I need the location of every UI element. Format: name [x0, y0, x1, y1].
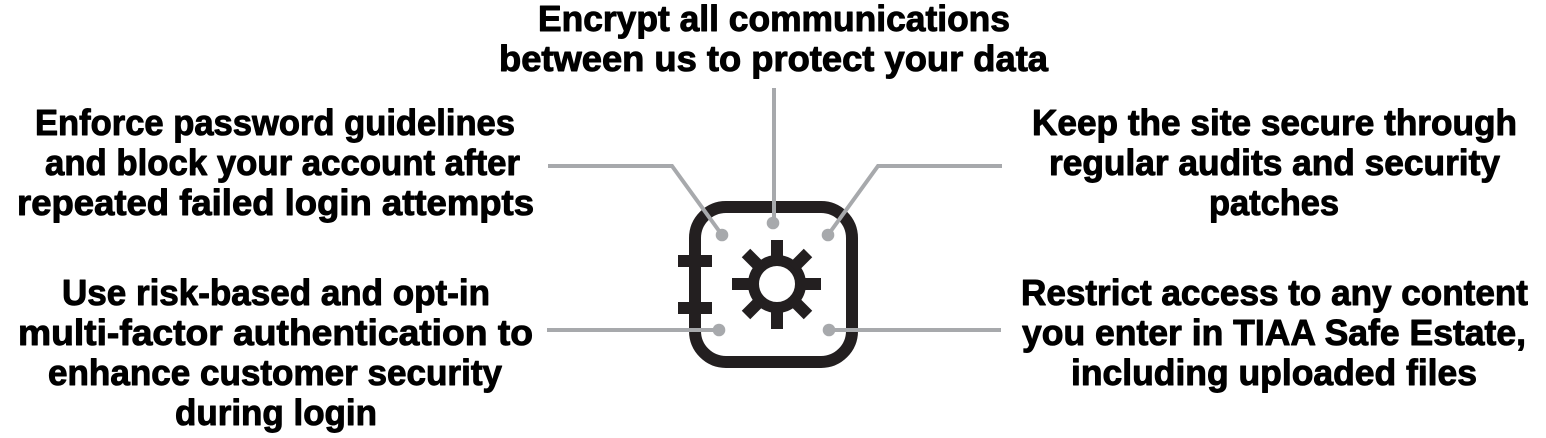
text: site audits: regular audits and security	[1049, 142, 1500, 183]
text: site audits: patches	[1209, 182, 1339, 223]
text: site audits	[1032, 102, 1517, 223]
text: restrict access: Restrict access to any content	[1021, 272, 1528, 313]
callout connectors	[547, 88, 1002, 330]
text: multi-factor authentication: enhance customer security	[48, 352, 502, 393]
text: password guidelines: Enforce password guidelines	[35, 102, 515, 143]
icon: safe	[678, 207, 852, 362]
text: password guidelines	[17, 102, 534, 223]
text: password guidelines: and block your account after	[45, 142, 520, 183]
text: restrict access: you enter in TIAA Safe Estate,	[1022, 312, 1526, 353]
text: restrict access: including uploaded files	[1071, 352, 1477, 393]
safe dial gear	[732, 240, 821, 329]
text: multi-factor authentication: during login	[175, 392, 377, 433]
text: encrypt communications	[499, 0, 1049, 79]
text: multi-factor authentication	[18, 272, 533, 433]
safe hinges	[678, 255, 712, 314]
text: site audits: Keep the site secure through	[1032, 102, 1517, 143]
text: encrypt communications: between us to protect your data	[499, 38, 1049, 79]
text: restrict access	[1021, 272, 1528, 393]
text: multi-factor authentication: multi-factor authentication to	[18, 312, 533, 353]
text: multi-factor authentication: Use risk-based and opt-in	[62, 272, 490, 313]
callout dots	[713, 217, 835, 336]
text: password guidelines: repeated failed login attempts	[17, 182, 534, 223]
safe body	[695, 207, 852, 362]
